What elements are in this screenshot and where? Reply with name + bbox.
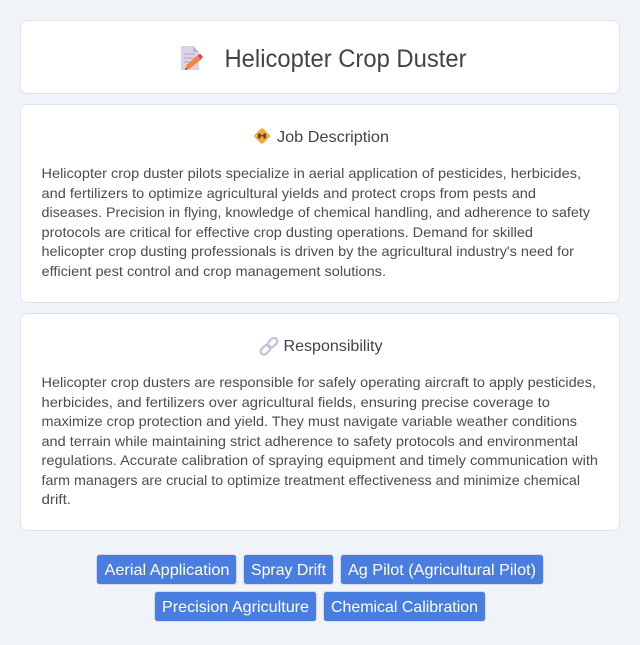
title text: Helicopter Crop Duster	[224, 45, 466, 73]
text block: responsibility	[42, 374, 598, 507]
icon: document with pencil	[181, 46, 203, 70]
tag: aerial application: Aerial Application	[104, 562, 230, 579]
text block: job description: Helicopter crop duster pilots specialize in aerial application of pesticides, herbicides,	[42, 165, 581, 181]
text block: responsibility: regulations. Accurate calibration of spraying equipment and timely communication with	[42, 452, 598, 468]
tag: ag pilot	[340, 554, 544, 584]
panel: responsibility	[20, 314, 620, 530]
text block: job description: helicopter crop dusting professionals is driven by the agricultural industry's need for	[42, 243, 574, 259]
tag: spray drift	[244, 554, 334, 584]
tag: precision agriculture	[154, 592, 316, 622]
tag: chemical calibration	[324, 592, 486, 622]
text block: responsibility: herbicides, and fertilizers over agricultural fields, ensuring precise coverage to	[42, 394, 550, 410]
tag: chemical calibration: Chemical Calibration	[331, 599, 478, 616]
panel: job description	[20, 104, 620, 302]
text block: responsibility: Helicopter crop dusters are responsible for safely operating aircraft to apply pesticides,	[42, 374, 596, 390]
tag: ag pilot: Ag Pilot (Agricultural Pilot)	[348, 562, 536, 579]
text block: responsibility: and terrain while maintaining strict adherence to safety protocols and environmental	[42, 433, 578, 449]
icon: chain link	[259, 337, 279, 356]
panel: title	[20, 20, 620, 94]
tag: spray drift: Spray Drift	[251, 562, 327, 579]
text block: responsibility: farm managers are crucial to optimize treatment effectiveness and minimize chemical	[42, 472, 580, 488]
text block: responsibility: maximize crop protection and yield. They must navigate variable weather conditions	[42, 413, 577, 429]
text block: job description: and fertilizers to optimize agricultural yields and protect crops from pests and	[42, 185, 536, 201]
icon: diamond sign	[254, 128, 270, 144]
text block: job description: efficient pest control and crop management solutions.	[42, 263, 386, 279]
text block: job description: protocols are critical for effective crop dusting operations. Demand for skilled	[42, 224, 533, 240]
text block: responsibility: drift.	[42, 491, 71, 507]
tag: precision agriculture: Precision Agriculture	[162, 599, 309, 616]
heading: responsibility: Responsibility	[284, 338, 382, 355]
text block: job description	[42, 165, 590, 279]
tag: aerial application	[96, 554, 236, 584]
text block: job description: diseases. Precision in flying, knowledge of chemical handling, and adherence to safety	[42, 204, 590, 220]
heading: job description: Job Description	[277, 129, 389, 146]
